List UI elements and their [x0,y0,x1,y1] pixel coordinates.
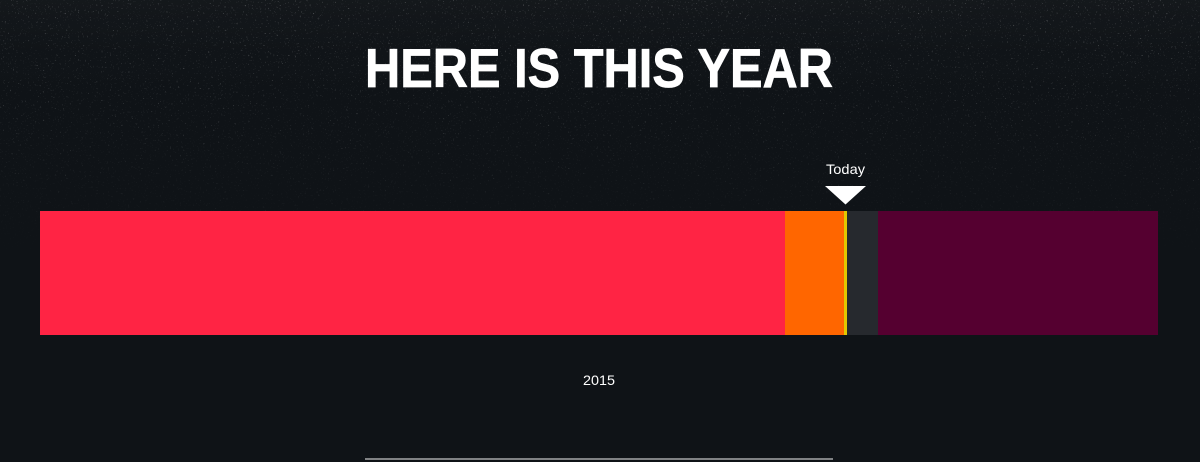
title: HERE IS THIS YEAR [365,37,833,99]
segment: yellow today line [844,211,847,335]
segment: red [40,211,785,335]
year label: 2015 [583,372,615,388]
segment: orange [785,211,844,335]
segment: maroon [878,211,1158,335]
icon: downward triangle pointer [825,186,866,204]
year progress bar [40,211,1158,335]
segment: dark grey [847,211,878,335]
today label: Today [826,161,865,177]
bottom rule [365,458,833,460]
today marker [825,161,866,204]
